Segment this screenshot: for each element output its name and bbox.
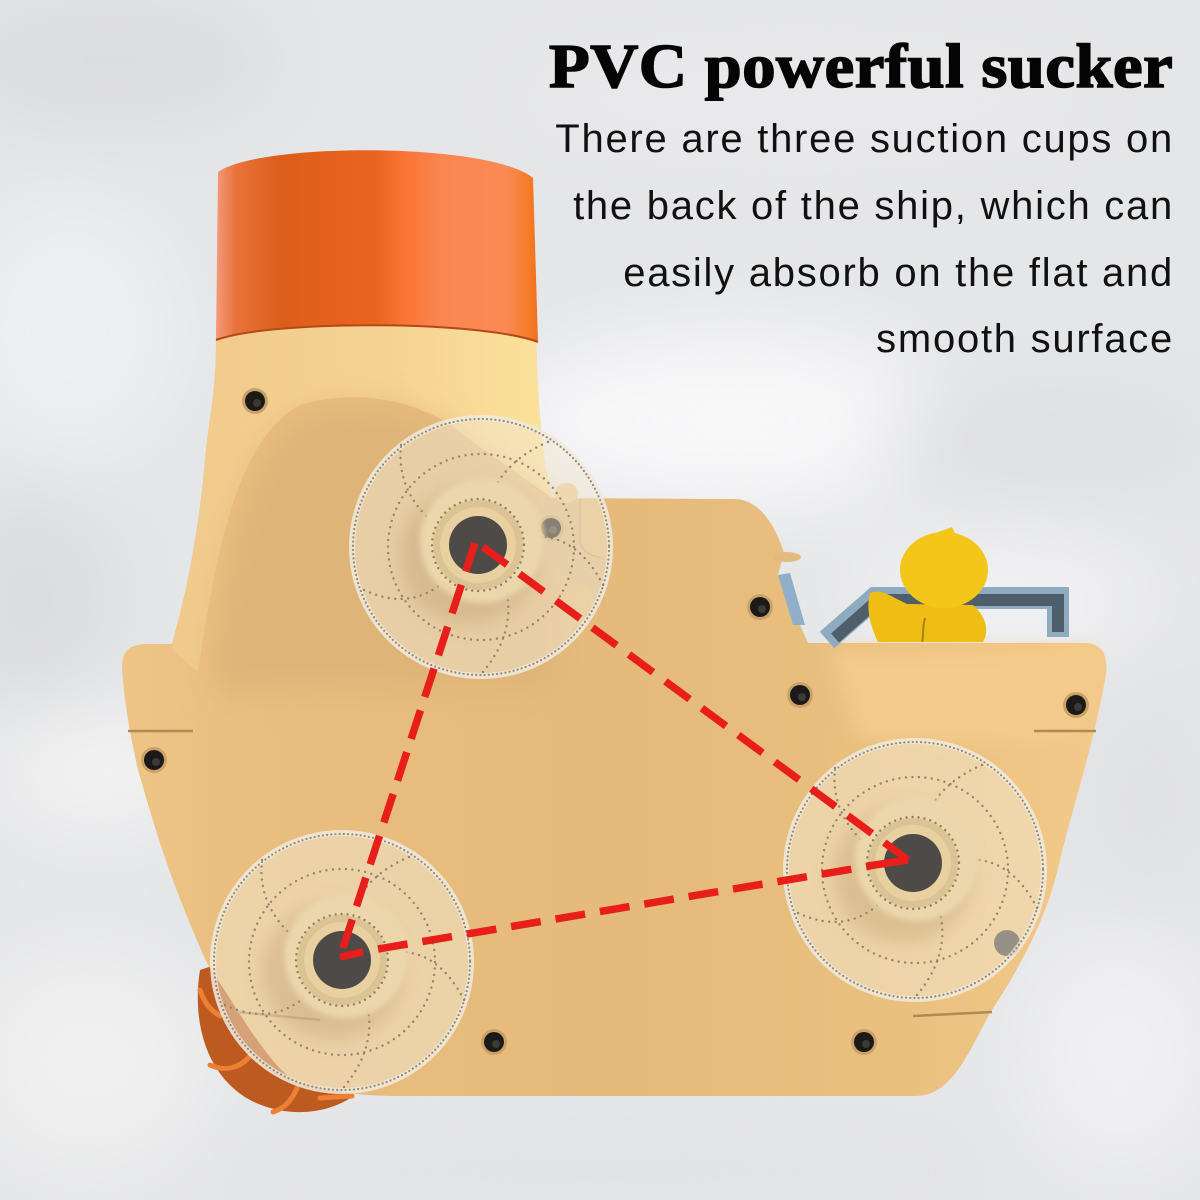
stern slots <box>128 731 1096 1020</box>
description text: easily absorb on the flat and <box>623 251 1174 295</box>
description text: the back of the ship, which can <box>573 184 1174 228</box>
description text: There are three suction cups on <box>555 117 1174 161</box>
suction cup top <box>349 415 613 679</box>
suction cup right <box>783 738 1047 1002</box>
neck shadow <box>212 407 560 690</box>
deck highlight <box>830 650 1093 740</box>
red dashed triangle <box>340 543 908 957</box>
cabin lip <box>773 552 801 562</box>
funnel seam <box>216 325 538 342</box>
ship hull <box>122 320 1106 1096</box>
railing <box>827 598 1058 640</box>
screw holes <box>141 388 1089 1055</box>
suction cup left <box>210 830 474 1094</box>
title: PVC powerful sucker <box>549 33 1173 101</box>
ship neck light band <box>172 320 552 672</box>
paddle wheel <box>198 960 352 1112</box>
description text <box>555 117 1174 361</box>
funnel <box>216 150 538 342</box>
suction cups <box>210 415 1047 1094</box>
description text: smooth surface <box>876 317 1174 361</box>
cabin pad and knob <box>540 483 605 610</box>
window <box>778 573 805 625</box>
icon: rubber duck <box>868 527 988 642</box>
